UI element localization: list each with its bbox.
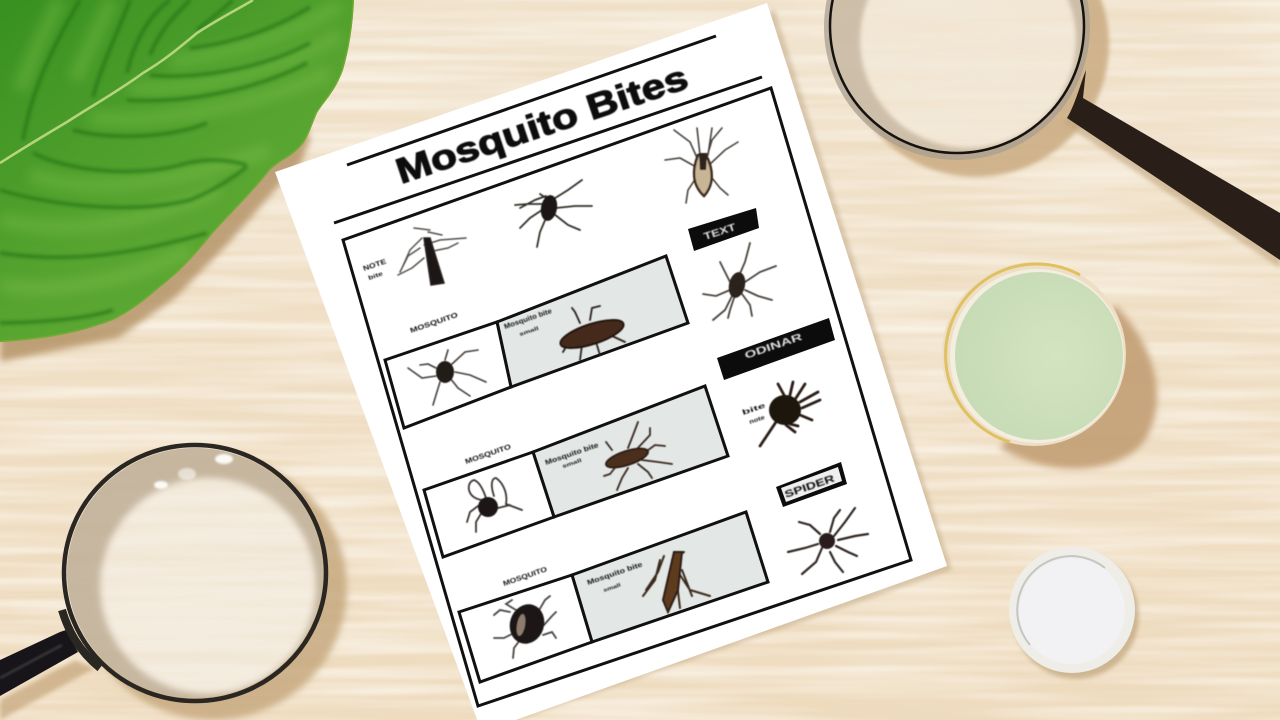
icon: spider bottom right (788, 508, 868, 574)
row 1 boxes (385, 256, 688, 428)
icon: magnifying glass top right (823, 0, 1280, 260)
leaf edge (0, 0, 354, 342)
tag: ordinary: ODINAR (743, 332, 805, 362)
small label tags (688, 208, 847, 507)
paper shadow (283, 10, 952, 720)
small captions: bite (741, 402, 767, 417)
handle shadow bottom (0, 660, 95, 720)
small captions: note (749, 415, 767, 426)
title: Mosquito Bites (391, 58, 693, 192)
lens bottom (67, 448, 323, 698)
inner frame (343, 88, 911, 706)
shadow of leaf (0, 100, 310, 362)
icon: bug row 2 gray (604, 422, 672, 490)
icon: spider row 1 small (408, 350, 486, 405)
lens highlights (154, 454, 233, 489)
small captions: Mosquito bite (544, 442, 600, 467)
tag: spider: SPIDER (783, 472, 837, 501)
tag: spider (776, 462, 847, 507)
leaf dark grooves (0, 0, 310, 323)
magnifier handle bottom (0, 630, 78, 696)
panel: paper sheet (275, 3, 947, 720)
tag: text (688, 208, 759, 251)
leaf midrib (0, 0, 253, 163)
icon: bug right spider (703, 243, 776, 320)
bottom magnifier shadow (79, 456, 347, 720)
small captions: small (562, 457, 583, 470)
small captions: Mosquito bite (586, 561, 644, 587)
icon: furry bug right (760, 382, 820, 446)
icon: balm jar (942, 262, 1126, 446)
lens top (831, 0, 1083, 152)
rim top (827, 0, 1087, 157)
small captions: MOSQUITO (464, 443, 513, 466)
small captions: MOSQUITO (409, 312, 460, 335)
icon: green leaf (0, 0, 354, 342)
rim bottom (64, 445, 326, 701)
small captions: NOTE (362, 258, 388, 273)
small captions: Mosquito bite (503, 308, 553, 331)
icon: mosquito row 3 gray (643, 552, 710, 612)
cap shadow (1013, 553, 1139, 679)
small captions: small (519, 325, 540, 338)
small captions: MOSQUITO (502, 566, 549, 588)
leaf light bands (0, 0, 340, 288)
icon: bug upper left (398, 228, 466, 285)
icon: spider row 2 small (467, 478, 522, 532)
icon: magnifying glass bottom left (0, 438, 330, 710)
icon: white cap (1009, 547, 1135, 673)
small captions: small (603, 582, 622, 594)
jar shadow (1000, 305, 1157, 469)
icon: tick row 3 small (494, 596, 556, 658)
top magnifying glass shadow (843, 0, 1109, 177)
icon: roach in row 1 (558, 306, 626, 360)
magnifier handle top (1067, 70, 1280, 260)
small captions (362, 258, 767, 594)
tag: text: TEXT (703, 222, 737, 243)
small captions: bite (368, 271, 385, 282)
row 2 boxes (424, 386, 728, 557)
title rule top (347, 36, 716, 165)
row 3 boxes (459, 512, 768, 682)
handle shadow (1062, 112, 1280, 268)
icon: bug top right (665, 128, 738, 203)
icon: bug top middle (515, 180, 592, 247)
tag: ordinary (717, 318, 835, 380)
title rule bottom (334, 77, 762, 223)
